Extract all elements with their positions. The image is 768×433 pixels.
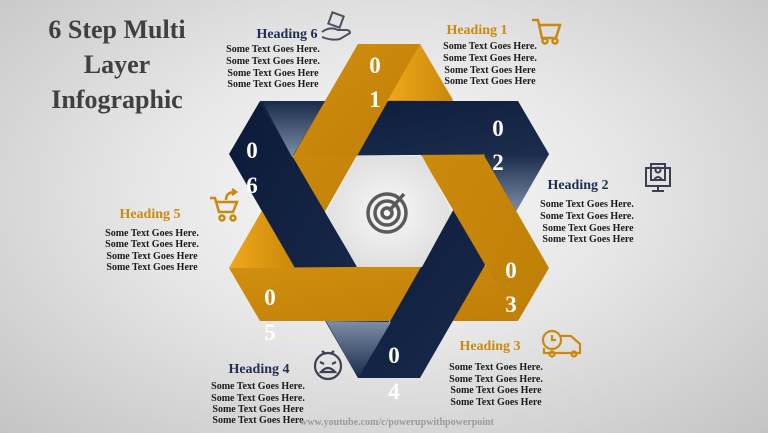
title: Layer — [84, 50, 150, 79]
step numbers: 0 — [264, 285, 276, 310]
text block: heading 5: Some Text Goes Here. — [105, 239, 199, 250]
text block: heading 6: Some Text Goes Here. — [226, 56, 320, 67]
text block: heading 4: Some Text Goes Here. — [211, 393, 305, 404]
step numbers: 3 — [505, 292, 517, 317]
step numbers: 5 — [264, 320, 276, 345]
text block: heading 3: Some Text Goes Here. — [449, 362, 543, 373]
band 6 navy — [229, 101, 390, 378]
text block: heading 3: Heading 3 — [459, 339, 521, 354]
step numbers — [246, 53, 517, 404]
step numbers: 1 — [369, 87, 381, 112]
text block: heading 1: Some Text Goes Here. — [443, 41, 537, 52]
shading triangles — [262, 101, 325, 157]
text block: heading 1: Some Text Goes Here — [444, 65, 536, 76]
text block: heading 4 — [211, 362, 305, 426]
band 1 gold — [229, 44, 420, 268]
watermark: www.youtube.com/c/powerupwithpowerpoint — [300, 417, 495, 428]
icon: hand — [322, 12, 350, 40]
icon: truck with clock — [543, 331, 580, 356]
text block: heading 2: Some Text Goes Here — [542, 223, 634, 234]
text block: heading 4: Some Text Goes Here — [212, 415, 304, 426]
step numbers: 0 — [505, 258, 517, 283]
text block: heading 6: Some Text Goes Here — [227, 68, 319, 79]
text block: heading 6: Heading 6 — [256, 27, 318, 42]
step numbers: 6 — [246, 173, 258, 198]
step numbers: 0 — [492, 116, 504, 141]
text block: heading 6 — [226, 27, 320, 90]
text block: heading 1 — [443, 23, 537, 87]
text block: heading 4: Some Text Goes Here. — [211, 381, 305, 392]
band 3 gold — [388, 44, 549, 321]
text block: heading 5: Some Text Goes Here. — [105, 228, 199, 239]
band 5 gold — [229, 266, 518, 321]
icon: target — [368, 194, 406, 232]
text block: heading 2: Some Text Goes Here. — [540, 199, 634, 210]
icon: monitor — [646, 164, 670, 191]
step numbers: 0 — [246, 138, 258, 163]
text block: heading 5: Some Text Goes Here — [106, 262, 198, 273]
text block: heading 2: Some Text Goes Here. — [540, 211, 634, 222]
text block: heading 3 — [449, 339, 543, 408]
hexagon woven diagram — [229, 44, 549, 378]
band 4 navy — [358, 154, 549, 378]
text block: heading 3: Some Text Goes Here — [450, 397, 542, 408]
title — [48, 15, 186, 114]
text block: heading 6: Some Text Goes Here. — [226, 44, 320, 55]
text block: heading 5 — [105, 207, 199, 273]
step numbers: 0 — [388, 343, 400, 368]
step numbers: 2 — [492, 150, 504, 175]
text block: heading 1: Heading 1 — [446, 23, 508, 38]
text block: heading 2: Heading 2 — [547, 178, 609, 193]
band 1 over band 2 — [293, 44, 420, 156]
text block: heading 6: Some Text Goes Here — [227, 79, 319, 90]
step numbers: 4 — [388, 379, 400, 404]
band 2 navy — [260, 101, 549, 156]
inner hexagon — [326, 156, 452, 267]
title: Infographic — [51, 85, 183, 114]
text block: heading 5: Heading 5 — [119, 207, 181, 222]
text block: heading 2: Some Text Goes Here — [542, 234, 634, 245]
step numbers: 0 — [369, 53, 381, 78]
icon: cart — [532, 20, 560, 44]
title: 6 Step Multi — [48, 15, 186, 44]
icon: cart arrow — [210, 189, 237, 220]
text block: heading 1: Some Text Goes Here — [444, 76, 536, 87]
text block: heading 4: Some Text Goes Here — [212, 404, 304, 415]
text block: heading 2 — [540, 178, 634, 245]
text block: heading 5: Some Text Goes Here — [106, 251, 198, 262]
icon: crying face — [315, 351, 341, 379]
text block: heading 3: Some Text Goes Here. — [449, 374, 543, 385]
text block: heading 4: Heading 4 — [228, 362, 290, 377]
text block: heading 3: Some Text Goes Here — [450, 385, 542, 396]
text block: heading 1: Some Text Goes Here. — [443, 53, 537, 64]
